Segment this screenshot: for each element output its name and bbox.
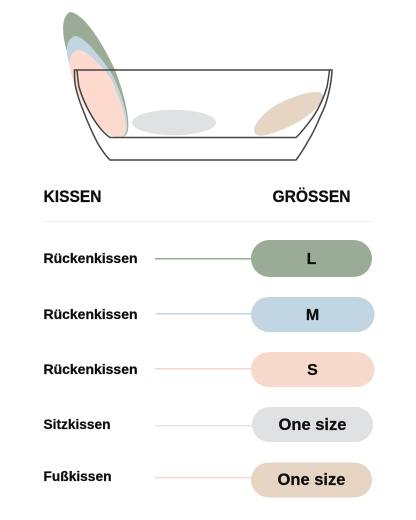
connector xyxy=(155,425,252,426)
row: Rückenkissen S xyxy=(44,352,374,387)
label: Rückenkissen xyxy=(44,251,138,266)
icon: bathtub with cushions xyxy=(63,12,332,160)
connector xyxy=(155,258,252,260)
cushion: back S xyxy=(70,50,126,137)
size: One size xyxy=(278,471,346,489)
cushion: back M xyxy=(67,36,127,137)
size: M xyxy=(306,307,319,324)
tub outline xyxy=(74,70,332,160)
connector xyxy=(155,477,252,478)
label: Sitzkissen xyxy=(44,417,110,432)
row: Rückenkissen L xyxy=(44,240,372,277)
size: One size xyxy=(278,416,346,434)
connector xyxy=(156,313,252,314)
cushion: seat xyxy=(132,110,216,135)
label: Fußkissen xyxy=(44,469,112,484)
label: Rückenkissen xyxy=(44,307,138,322)
size: L xyxy=(307,251,317,268)
heading: KISSEN: KISSEN xyxy=(44,188,102,206)
size pill xyxy=(251,297,374,332)
cushion: back L xyxy=(63,12,128,137)
label: Rückenkissen xyxy=(44,362,138,377)
heading: GRÖSSEN: GRÖSSEN xyxy=(272,187,350,206)
connector xyxy=(155,368,252,370)
row: Rückenkissen M xyxy=(44,297,374,332)
cushion: foot xyxy=(254,92,323,136)
size: S xyxy=(307,362,318,379)
size pill xyxy=(252,407,373,442)
row: Fußkissen xyxy=(44,462,372,498)
row: Sitzkissen xyxy=(44,407,373,442)
size pill xyxy=(251,240,372,277)
size pill xyxy=(251,462,372,498)
size pill xyxy=(251,352,374,387)
